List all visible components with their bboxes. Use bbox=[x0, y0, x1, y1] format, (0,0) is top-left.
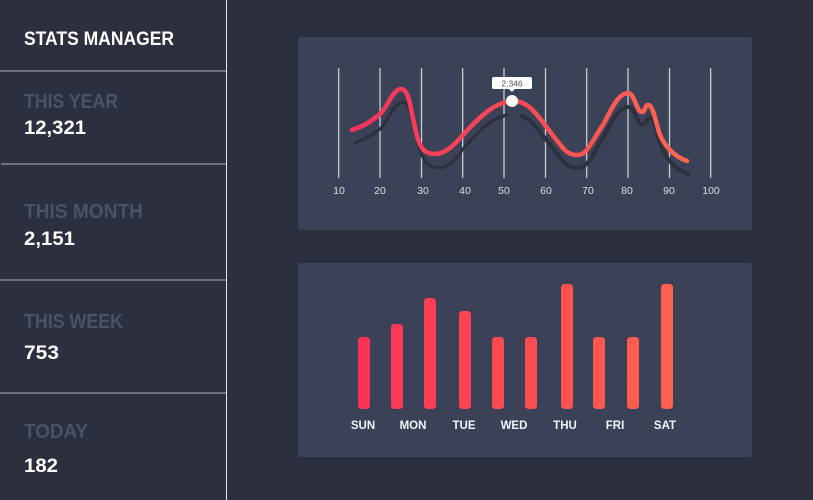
line main series bbox=[352, 89, 687, 161]
stat: this week: 753 bbox=[24, 343, 59, 364]
day labels: TUE bbox=[452, 420, 476, 432]
x axis labels: 70 bbox=[582, 185, 594, 197]
stat: today: 182 bbox=[24, 456, 58, 477]
day labels: WED bbox=[501, 420, 527, 432]
stat: this year: THIS YEAR bbox=[24, 91, 118, 113]
x axis labels: 90 bbox=[663, 185, 675, 197]
stat: today: TODAY bbox=[24, 421, 89, 443]
stat: this week bbox=[24, 311, 123, 364]
stat: this month: 2,151 bbox=[24, 229, 75, 250]
day labels: MON bbox=[400, 420, 426, 432]
x axis labels: 40 bbox=[459, 185, 471, 197]
x axis labels bbox=[333, 185, 720, 197]
stat: this week: THIS WEEK bbox=[24, 311, 123, 333]
bars bbox=[358, 284, 673, 409]
data point marker bbox=[506, 95, 518, 107]
tooltip bbox=[492, 77, 532, 92]
x axis labels: 50 bbox=[498, 185, 510, 197]
x axis labels: 20 bbox=[374, 185, 386, 197]
panel: line chart bbox=[298, 37, 752, 230]
day labels: SUN bbox=[351, 420, 375, 432]
stat: today bbox=[24, 421, 89, 477]
stat: this month: THIS MONTH bbox=[24, 201, 143, 223]
x axis labels: 100 bbox=[702, 185, 720, 197]
day labels: FRI bbox=[606, 420, 624, 432]
day labels: THU bbox=[553, 420, 577, 432]
x axis labels: 60 bbox=[540, 185, 552, 197]
x axis labels: 10 bbox=[333, 185, 345, 197]
x axis labels: 80 bbox=[621, 185, 633, 197]
x axis labels: 30 bbox=[417, 185, 429, 197]
stat: this year bbox=[24, 91, 118, 139]
panel: bar chart bbox=[298, 263, 752, 457]
stat: this year: 12,321 bbox=[24, 118, 86, 139]
day labels bbox=[351, 420, 676, 432]
title: STATS MANAGER bbox=[24, 29, 174, 50]
stat: this month bbox=[24, 201, 143, 250]
day labels: SAT bbox=[654, 420, 676, 432]
tooltip: 2,346 bbox=[501, 78, 523, 88]
sidebar bbox=[0, 0, 226, 500]
line shadow series bbox=[355, 102, 688, 174]
